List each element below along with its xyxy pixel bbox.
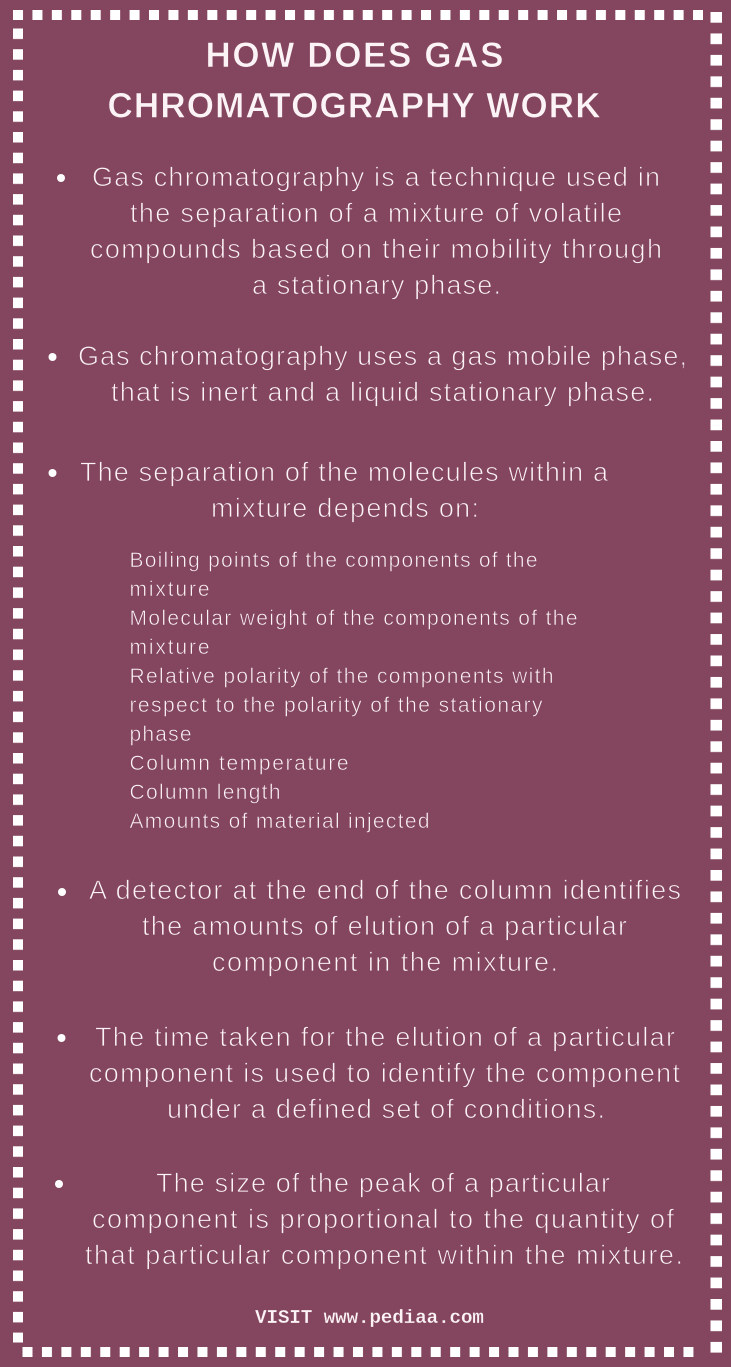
list: separation factors <box>130 549 578 833</box>
text block: detector bullet <box>58 875 681 977</box>
text block: mobile phase bullet: that is inert and a liquid stationary phase. <box>111 377 654 407</box>
text block: definition bullet <box>57 162 662 300</box>
list: separation factors: mixture <box>130 578 210 601</box>
list: separation factors: Relative polarity of the components with <box>130 665 554 688</box>
text block: separation bullet: The separation of the molecules within a <box>80 457 609 487</box>
text block: peak size bullet: that particular component within the mixture. <box>85 1240 683 1270</box>
text block: mobile phase bullet <box>48 341 687 407</box>
text block: detector bullet: the amounts of elution of a particular <box>142 911 627 941</box>
list: separation factors: Boiling points of the components of the <box>130 549 538 572</box>
text block: definition bullet: the separation of a mixture of volatile <box>130 198 622 228</box>
text block: definition bullet: compounds based on their mobility through <box>90 234 662 264</box>
text block: separation bullet: mixture depends on: <box>211 493 479 523</box>
title: CHROMATOGRAPHY WORK <box>108 86 600 126</box>
text block: peak size bullet: The size of the peak of a particular <box>156 1168 610 1198</box>
text block: elution time bullet <box>58 1022 680 1124</box>
text block: elution time bullet: component is used to identify the component <box>89 1058 680 1088</box>
list: separation factors: Molecular weight of the components of the <box>130 607 578 630</box>
list: separation factors: phase <box>130 723 192 746</box>
title <box>108 36 600 126</box>
list: separation factors: Column temperature <box>130 752 348 775</box>
text block: peak size bullet <box>55 1168 683 1270</box>
list: separation factors: mixture <box>130 636 210 659</box>
text block: elution time bullet: under a defined set of conditions. <box>167 1094 605 1124</box>
list: separation factors: Amounts of material injected <box>130 810 430 833</box>
text block: detector bullet: component in the mixture. <box>212 947 558 977</box>
list: separation factors: respect to the polarity of the stationary <box>130 694 543 717</box>
text block: definition bullet: Gas chromatography is a technique used in <box>92 162 660 192</box>
text block: elution time bullet: The time taken for the elution of a particular <box>95 1022 675 1052</box>
text block: mobile phase bullet: Gas chromatography uses a gas mobile phase, <box>78 341 687 371</box>
text block: detector bullet: A detector at the end of the column identifies <box>89 875 681 905</box>
text block: separation bullet <box>48 457 609 523</box>
text block: definition bullet: a stationary phase. <box>252 270 501 300</box>
text block: peak size bullet: component is proportional to the quantity of <box>92 1204 674 1234</box>
footer link: VISIT www.pediaa.com <box>255 1307 484 1329</box>
list: separation factors: Column length <box>130 781 280 804</box>
title: HOW DOES GAS <box>206 36 504 75</box>
